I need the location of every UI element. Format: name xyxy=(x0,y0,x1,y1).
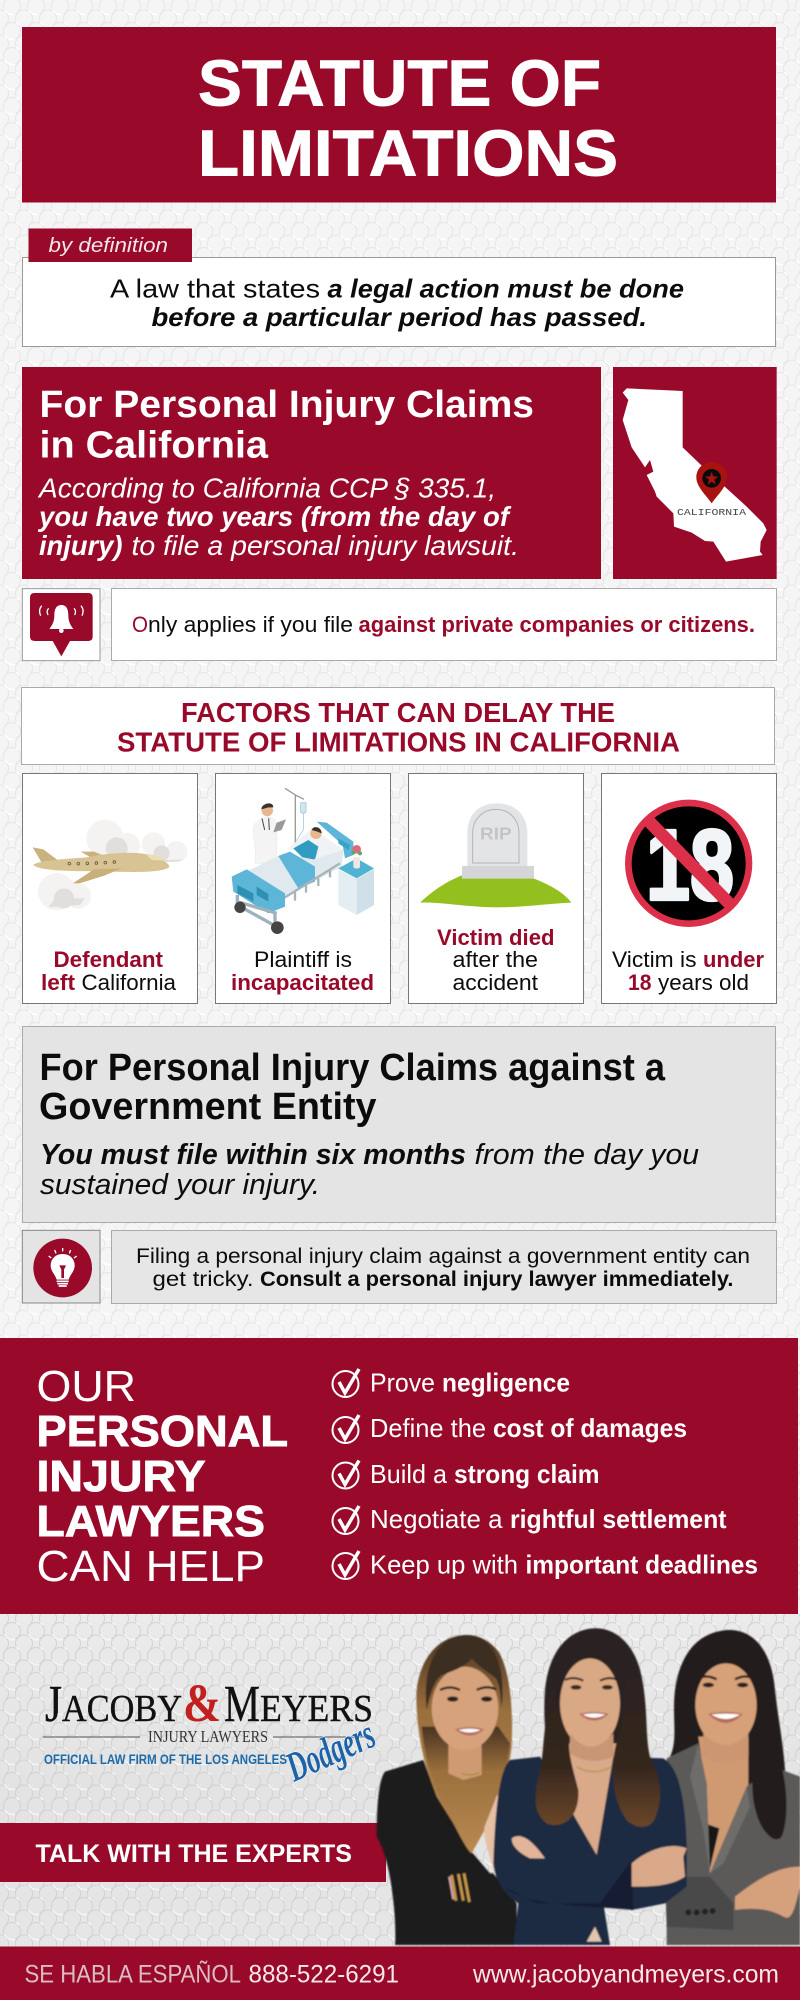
icon: no under 18: 18 xyxy=(646,810,734,922)
logo: Jacoby & Meyers: INJURY LAWYERS xyxy=(148,1727,268,1746)
item: strong claim: Build a xyxy=(370,1459,448,1489)
caption: Defendant xyxy=(54,947,164,972)
logo: Jacoby & Meyers: OFFICIAL LAW FIRM OF THE LOS ANGELES xyxy=(44,1752,287,1767)
heading: LAWYERS xyxy=(36,1497,265,1546)
icon: airplane xyxy=(33,820,187,910)
caption xyxy=(612,947,764,995)
logo: Jacoby & Meyers: M xyxy=(224,1676,260,1733)
body text xyxy=(37,472,519,561)
photo: three lawyers xyxy=(377,1628,800,1945)
item: rightful settlement: rightful settlement xyxy=(510,1504,727,1534)
heading: For Personal Injury Claims against a xyxy=(40,1047,666,1089)
note: consult a lawyer: get tricky. xyxy=(152,1268,254,1291)
map label: CALIFORNIA xyxy=(677,507,746,518)
title banner: STATUTE OF xyxy=(198,46,601,120)
item: strong claim xyxy=(332,1459,600,1489)
icon: light bulb xyxy=(33,1239,92,1297)
item: cost of damages xyxy=(332,1413,687,1443)
heading: CAN HELP xyxy=(36,1542,265,1591)
caption: 18 xyxy=(628,970,652,995)
logo: Jacoby & Meyers: J xyxy=(45,1676,62,1733)
caption xyxy=(231,947,374,995)
item: prove negligence xyxy=(332,1368,570,1398)
bell icon box xyxy=(22,589,100,661)
heading: OUR xyxy=(36,1362,136,1411)
heading xyxy=(36,1362,288,1591)
tab: by definition xyxy=(28,228,192,262)
note: consult a lawyer: Consult a personal injury lawyer immediately. xyxy=(260,1268,734,1291)
item: important deadlines: important deadlines xyxy=(526,1550,758,1580)
body text: sustained your injury. xyxy=(40,1169,320,1201)
heading: INJURY xyxy=(36,1452,206,1501)
lawyer: left, black blazer xyxy=(377,1635,517,1945)
panel: our lawyers can help xyxy=(0,1338,798,1614)
caption: left xyxy=(41,970,76,995)
footer bar: SE HABLA ESPAÑOL xyxy=(24,1960,241,1988)
panel: California map xyxy=(613,367,777,579)
note: only applies: nly applies if you file xyxy=(148,612,353,637)
body text xyxy=(40,1139,699,1201)
body text: to file a personal injury lawsuit. xyxy=(132,530,519,561)
talk with the experts bar: TALK WITH THE EXPERTS xyxy=(36,1840,352,1868)
heading: PERSONAL xyxy=(36,1407,288,1456)
note: only applies xyxy=(112,588,776,660)
heading: For Personal Injury Claims xyxy=(40,384,534,426)
heading: factors xyxy=(22,688,774,764)
icon: gravestone xyxy=(421,803,571,907)
panel: government entity claims xyxy=(22,1026,776,1222)
logo: Jacoby & Meyers xyxy=(43,1673,382,1791)
card: plaintiff incapacitated xyxy=(216,774,390,1004)
item: important deadlines: Keep up with xyxy=(370,1550,518,1580)
heading: factors: STATUTE OF LIMITATIONS IN CALIFORNIA xyxy=(117,726,680,758)
item: prove negligence: Prove xyxy=(370,1368,435,1398)
caption: Victim is xyxy=(612,947,696,972)
definition text: A law that states xyxy=(110,274,320,304)
bulb icon box xyxy=(22,1230,100,1303)
heading: factors: FACTORS THAT CAN DELAY THE xyxy=(181,697,615,728)
talk with the experts bar xyxy=(0,1823,386,1882)
heading xyxy=(39,1047,666,1128)
item: rightful settlement: Negotiate a xyxy=(370,1504,503,1534)
caption: incapacitated xyxy=(231,970,374,995)
footer bar xyxy=(0,1946,800,2000)
tab: by definition: by definition xyxy=(48,235,168,257)
body text: You must file within six months xyxy=(40,1139,466,1171)
item: important deadlines xyxy=(332,1550,758,1580)
item: cost of damages: Define the xyxy=(370,1413,486,1443)
footer bar: 888-522-6291 xyxy=(248,1960,399,1988)
body text: from the day you xyxy=(474,1139,699,1171)
footer bar: www.jacobyandmeyers.com xyxy=(472,1960,779,1988)
body text: According to California CCP § 335.1, xyxy=(37,472,496,504)
caption: California xyxy=(82,970,177,995)
heading: in California xyxy=(40,424,269,466)
card: victim under 18 xyxy=(602,774,776,1004)
item: prove negligence: negligence xyxy=(442,1368,570,1398)
icon: hospital bed xyxy=(232,788,374,934)
checklist xyxy=(332,1368,758,1580)
caption: Victim died xyxy=(437,925,554,950)
icon: gravestone: RIP xyxy=(480,823,512,843)
card: victim died xyxy=(408,774,584,1004)
caption: after the xyxy=(452,947,538,972)
lawyer: right, gray blazer xyxy=(665,1630,800,1945)
item: cost of damages: cost of damages xyxy=(493,1413,687,1443)
icon: bell xyxy=(30,593,93,656)
caption: under xyxy=(703,947,764,972)
heading: Government Entity xyxy=(39,1086,376,1128)
panel: personal injury claims in California xyxy=(22,367,601,579)
note: consult a lawyer: Filing a personal injury claim against a government entity can xyxy=(136,1245,750,1268)
definition text: before a particular period has passed. xyxy=(152,302,647,332)
panel: definition xyxy=(22,228,776,346)
definition text xyxy=(110,274,684,332)
logo: Jacoby & Meyers: Dodgers xyxy=(279,1712,382,1791)
logo: Jacoby & Meyers: ACOBY xyxy=(62,1688,182,1730)
item: strong claim: strong claim xyxy=(454,1459,600,1489)
caption: years old xyxy=(658,970,749,995)
map of California xyxy=(623,388,767,562)
definition text: a legal action must be done xyxy=(328,274,684,304)
caption xyxy=(41,947,177,995)
heading xyxy=(40,384,534,466)
logo: Jacoby & Meyers: & xyxy=(183,1673,221,1733)
body text: you have two years (from the day of xyxy=(37,501,512,532)
card: defendant left xyxy=(22,774,198,1004)
caption xyxy=(437,925,554,995)
caption: accident xyxy=(452,970,538,995)
body text: injury) xyxy=(39,530,122,561)
title banner xyxy=(22,27,776,202)
lawyer: centre, navy blazer xyxy=(493,1628,687,1945)
note: consult a lawyer xyxy=(112,1230,776,1304)
note: only applies: O xyxy=(132,612,148,637)
caption: Plaintiff is xyxy=(254,947,352,972)
location pin xyxy=(696,462,727,503)
logo: Jacoby & Meyers: EYERS xyxy=(260,1688,373,1730)
item: rightful settlement xyxy=(332,1504,727,1534)
title banner: LIMITATIONS xyxy=(198,116,618,190)
note: only applies: against private companies or citizens. xyxy=(358,612,755,637)
